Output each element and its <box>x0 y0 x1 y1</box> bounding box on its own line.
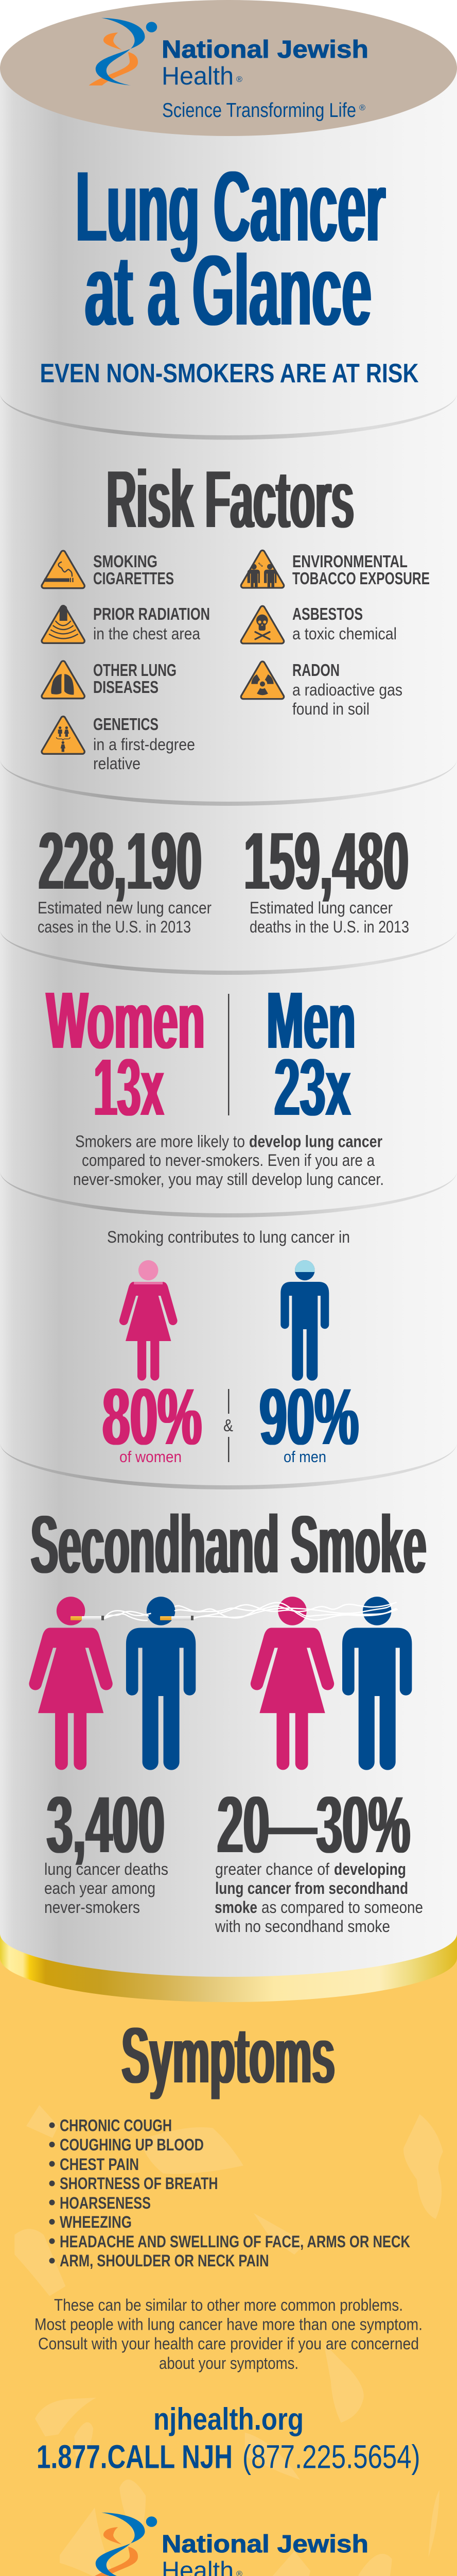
grey cylinder body <box>0 68 457 1977</box>
paragraph: smokers more likely: never-smoker, you may still develop lung cancer. <box>73 1170 384 1189</box>
stat: 20-30% greater chance: as compared to someone <box>261 1898 423 1917</box>
symptom list: CHEST PAIN <box>60 2155 139 2174</box>
icon: cigarette two <box>160 1616 194 1620</box>
icon: helix <box>89 18 157 86</box>
men risk multiplier: Men <box>267 974 356 1066</box>
logo wordmark: ® <box>359 104 365 112</box>
risk label: other lung diseases <box>93 660 177 697</box>
paragraph: smokers more likely: compared to never-smokers. Even if you are a <box>82 1151 375 1170</box>
figure: man smoker <box>126 1597 196 1770</box>
icon: helix bottom <box>89 2513 157 2576</box>
risk label: genetics <box>93 715 195 773</box>
logo wordmark <box>162 36 368 122</box>
logo: National Jewish Health bottom <box>89 2513 368 2576</box>
figure: woman smoker <box>29 1597 113 1770</box>
risk label: radon: found in soil <box>292 700 370 718</box>
stat: 20-30% greater chance: with no secondhand smoke <box>215 1917 390 1936</box>
stat: deaths <box>244 815 409 936</box>
paragraph: consult provider: These can be similar to other more common problems. <box>54 2296 403 2314</box>
logo wordmark: ® <box>236 75 242 84</box>
risk label: prior radiation: PRIOR RADIATION <box>93 604 210 623</box>
logo wordmark: Health <box>162 62 234 90</box>
stat: 3,400 deaths: 3,400 <box>46 1778 165 1870</box>
stat: 3,400 deaths: each year among <box>44 1879 155 1897</box>
contact: website: njhealth.org <box>153 2402 304 2436</box>
stat: 3,400 deaths: never-smokers <box>44 1898 140 1917</box>
stat: 3,400 deaths <box>44 1778 168 1917</box>
symptom list <box>49 2116 410 2270</box>
risk label: prior radiation: in the chest area <box>93 624 200 643</box>
vertical separator <box>228 994 230 1115</box>
icon: prior radiation <box>44 605 82 641</box>
risk label: genetics: GENETICS <box>93 715 159 734</box>
risk label: radon: RADON <box>292 660 340 680</box>
contact: phone: 1.877.CALL NJH <box>37 2438 233 2475</box>
paragraph: smokers more likely: develop lung cancer <box>249 1132 382 1151</box>
top ellipse lid <box>0 0 457 136</box>
icon: genetics <box>44 719 82 752</box>
risk label: environmental tobacco exposure: ENVIRONMENTAL <box>292 552 408 571</box>
risk label: prior radiation <box>93 604 210 643</box>
icon: radon trefoil <box>243 664 282 697</box>
stat: new cases: Estimated new lung cancer <box>38 899 212 917</box>
symptom list: CHRONIC COUGH <box>60 2116 172 2135</box>
title <box>76 149 385 347</box>
stat: 80% of women <box>102 1370 202 1466</box>
smoke trails <box>104 1602 398 1620</box>
stat: new cases <box>38 815 212 936</box>
stat: 90% of men: of men <box>284 1448 326 1466</box>
risk label: asbestos: a toxic chemical <box>292 624 397 643</box>
symptom list: ARM, SHOULDER OR NECK PAIN <box>60 2251 269 2270</box>
figure: man 90% <box>280 1260 329 1381</box>
women risk multiplier <box>46 974 205 1133</box>
stat: deaths: deaths in the U.S. in 2013 <box>250 918 409 936</box>
paragraph: smokers more likely: Smokers are more likely to <box>75 1132 245 1151</box>
icon: cigarette one <box>71 1616 104 1620</box>
risk label: genetics: relative <box>93 754 140 773</box>
men risk multiplier <box>267 974 356 1133</box>
gold band <box>0 1927 457 2002</box>
paragraph: consult provider: about your symptoms. <box>159 2354 298 2372</box>
men risk multiplier: 23x <box>274 1041 351 1133</box>
risk label: other lung diseases: DISEASES <box>93 677 159 697</box>
risk label: asbestos: ASBESTOS <box>292 604 363 623</box>
figure: man bystander <box>342 1597 412 1770</box>
stat: new cases: cases in the U.S. in 2013 <box>38 918 191 936</box>
risk label: environmental tobacco exposure <box>292 552 430 588</box>
stat: 90% of men <box>259 1370 359 1466</box>
risk label: other lung diseases: OTHER LUNG <box>93 660 177 680</box>
stat: deaths: Estimated lung cancer <box>250 899 393 917</box>
risk label: asbestos <box>292 604 397 643</box>
women risk multiplier: 13x <box>94 1041 164 1133</box>
icon: smoking cigarettes <box>43 553 82 586</box>
women risk multiplier: Women <box>46 974 205 1066</box>
symptom list: COUGHING UP BLOOD <box>60 2136 204 2154</box>
icon: environmental tobacco exposure <box>243 553 282 588</box>
stat: 20-30% greater chance: smoke <box>215 1898 257 1917</box>
stat: 20-30% greater chance: greater chance of <box>215 1860 329 1878</box>
symptom list: HOARSENESS <box>60 2194 151 2212</box>
stat: 20-30% greater chance <box>215 1778 423 1936</box>
stat: 80% of women: of women <box>119 1448 182 1466</box>
paragraph: smokers more likely <box>73 1132 384 1189</box>
text: smoking contributes: Smoking contributes to lung cancer in <box>107 1228 350 1246</box>
section divider: crescents <box>0 393 457 1489</box>
icon: asbestos skull and crossbones <box>243 608 282 641</box>
risk label: radon: a radioactive gas <box>292 681 402 699</box>
stat: 20-30% greater chance: lung cancer from secondhand <box>215 1879 408 1897</box>
ampersand separator: & <box>223 1416 233 1435</box>
symptom list: SHORTNESS OF BREATH <box>60 2174 218 2193</box>
risk label: radon <box>292 660 402 718</box>
risk label: smoking cigarettes: SMOKING <box>93 552 157 571</box>
stat: 20-30% greater chance: developing <box>334 1860 406 1878</box>
risk label: smoking cigarettes: CIGARETTES <box>93 569 174 588</box>
icon: other lung diseases <box>44 663 82 696</box>
stat: 3,400 deaths: lung cancer deaths <box>44 1860 168 1878</box>
paragraph: consult provider: Consult with your health care provider if you are concerned <box>38 2334 419 2353</box>
stat: 90% of men: 90% <box>259 1370 359 1462</box>
logo: National Jewish Health top <box>89 18 368 122</box>
stat: new cases: 228,190 <box>39 815 202 908</box>
logo wordmark bottom <box>162 2531 368 2576</box>
figure: woman bystander <box>251 1597 334 1770</box>
logo wordmark: National Jewish <box>162 36 368 63</box>
logo wordmark: Science Transforming Life <box>162 99 356 122</box>
yellow base of cylinder <box>0 1937 457 2576</box>
symptoms background leaf pattern <box>14 2105 443 2576</box>
risk label: genetics: in a first-degree <box>93 735 195 754</box>
logo wordmark bottom: National Jewish <box>162 2531 368 2558</box>
contact: phone <box>37 2438 420 2475</box>
symptom list: WHEEZING <box>60 2213 132 2231</box>
stat: 80% of women: 80% <box>102 1370 202 1462</box>
figure: woman 80% <box>119 1260 178 1381</box>
paragraph: consult provider <box>34 2296 423 2372</box>
risk label: smoking cigarettes <box>93 552 174 588</box>
